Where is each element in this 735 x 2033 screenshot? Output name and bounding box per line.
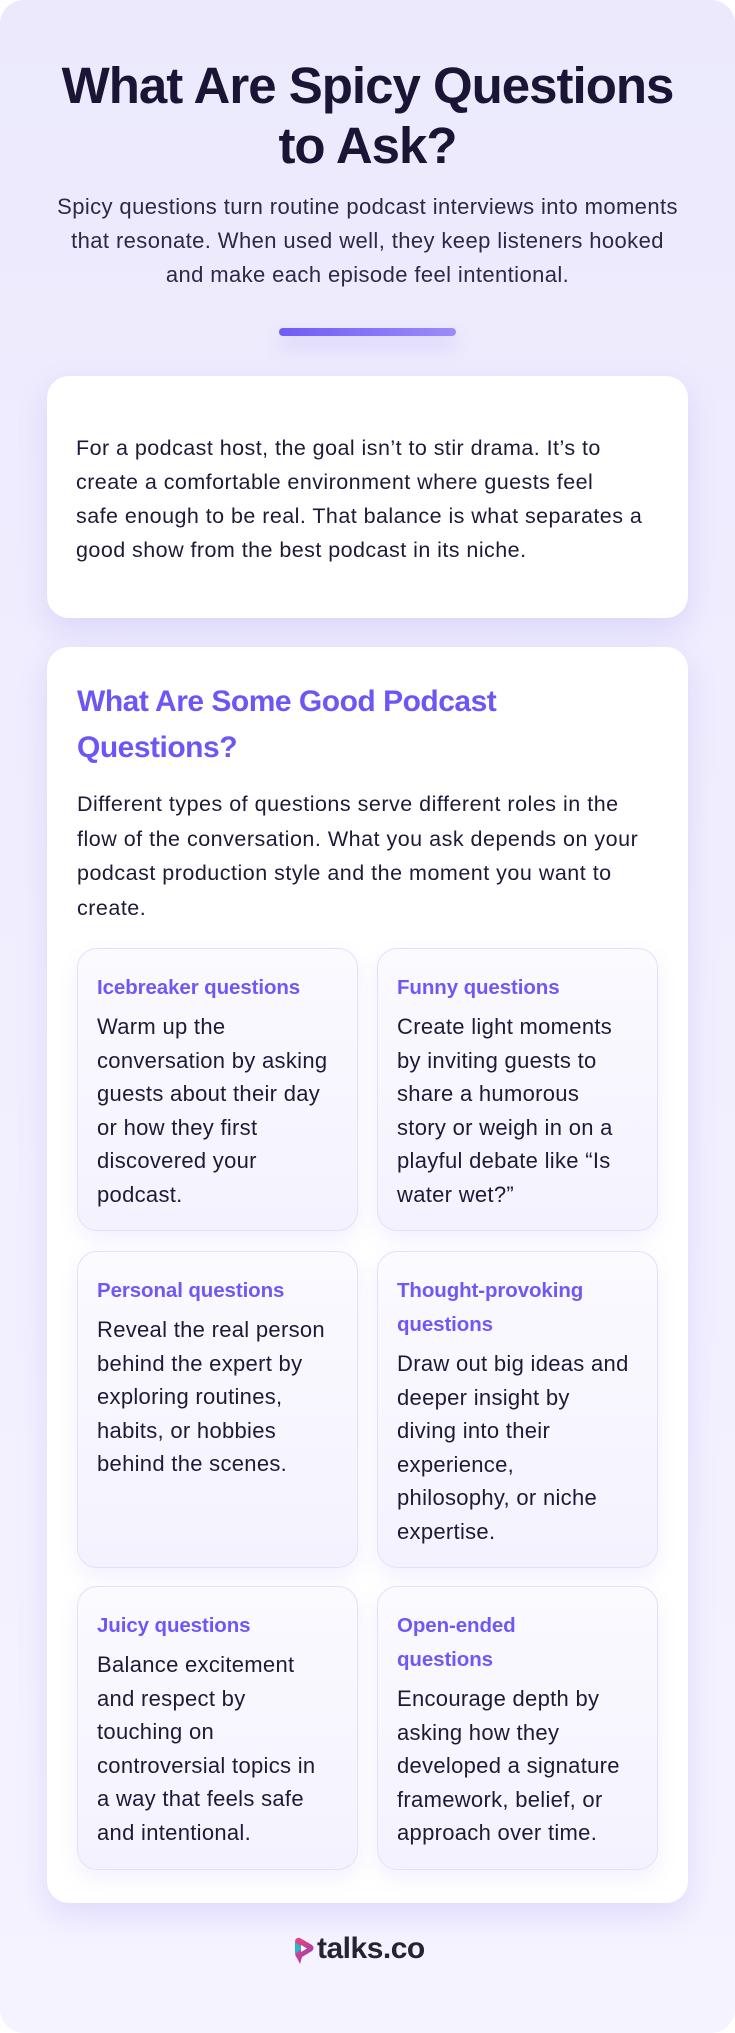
title bbox=[62, 57, 673, 174]
card: funny: by inviting guests to bbox=[397, 1048, 597, 1072]
section heading: What Are Some Good Podcast bbox=[77, 685, 496, 718]
card: funny: Create light moments bbox=[397, 1014, 612, 1039]
title: What Are Spicy Questions bbox=[62, 57, 673, 114]
icon: logo mark bbox=[295, 1938, 314, 1964]
card: thought-provoking: Thought-provoking bbox=[397, 1279, 583, 1302]
card: icebreaker: or how they first bbox=[97, 1114, 257, 1140]
card: thought-provoking: questions bbox=[397, 1313, 493, 1336]
panel: intro card bbox=[47, 376, 688, 618]
section intro text: flow of the conversation. What you ask depends on your bbox=[77, 826, 638, 850]
subtitle: that resonate. When used well, they keep listeners hooked bbox=[71, 228, 664, 253]
card: thought-provoking: philosophy, or niche bbox=[397, 1485, 597, 1510]
card: funny: story or weigh in on a bbox=[397, 1114, 613, 1140]
card: funny: Funny questions bbox=[397, 976, 560, 999]
card: open-ended: Open-ended bbox=[397, 1614, 516, 1637]
section intro text bbox=[77, 792, 638, 920]
card: funny bbox=[377, 948, 658, 1231]
card: icebreaker: podcast. bbox=[97, 1182, 183, 1206]
intro text: safe enough to be real. That balance is what separates a bbox=[76, 504, 642, 528]
section intro text: create. bbox=[77, 896, 146, 920]
card: juicy bbox=[77, 1586, 358, 1870]
intro text bbox=[76, 436, 642, 562]
intro text: create a comfortable environment where guests feel bbox=[76, 470, 593, 494]
card: icebreaker: Icebreaker questions bbox=[97, 976, 300, 999]
card: thought-provoking bbox=[377, 1251, 658, 1568]
card: funny: playful debate like “Is bbox=[397, 1148, 611, 1173]
card: open-ended bbox=[377, 1586, 658, 1870]
card: open-ended: approach over time. bbox=[397, 1820, 597, 1845]
card: thought-provoking: experience, bbox=[397, 1452, 514, 1476]
card: juicy: and respect by bbox=[97, 1686, 246, 1710]
subtitle bbox=[57, 194, 678, 287]
card: icebreaker: guests about their day bbox=[97, 1081, 320, 1106]
section heading bbox=[77, 685, 496, 764]
card: juicy: Balance excitement bbox=[97, 1652, 294, 1677]
section intro text: Different types of questions serve different roles in the bbox=[77, 792, 619, 816]
intro text: For a podcast host, the goal isn’t to stir drama. It’s to bbox=[76, 436, 601, 460]
card: juicy: a way that feels safe bbox=[97, 1786, 304, 1811]
card: thought-provoking: diving into their bbox=[397, 1418, 550, 1443]
card: icebreaker: Warm up the bbox=[97, 1014, 225, 1039]
logo text: talks.co bbox=[317, 1932, 425, 1965]
section heading: Questions? bbox=[77, 731, 237, 764]
subtitle: Spicy questions turn routine podcast interviews into moments bbox=[57, 194, 678, 219]
panel: good podcast questions bbox=[47, 647, 688, 1903]
card: juicy: Juicy questions bbox=[97, 1614, 250, 1637]
card: icebreaker bbox=[77, 948, 358, 1231]
card: funny: water wet?” bbox=[397, 1182, 514, 1206]
card: funny: share a humorous bbox=[397, 1081, 579, 1106]
card: open-ended: framework, belief, or bbox=[397, 1786, 603, 1812]
card: thought-provoking: expertise. bbox=[397, 1518, 495, 1544]
card: personal: exploring routines, bbox=[97, 1384, 282, 1409]
card: open-ended: Encourage depth by bbox=[397, 1686, 599, 1711]
card: thought-provoking: Draw out big ideas and bbox=[397, 1351, 629, 1376]
intro text: good show from the best podcast in its niche. bbox=[76, 538, 526, 562]
title: to Ask? bbox=[278, 117, 457, 174]
card: icebreaker: conversation by asking bbox=[97, 1048, 327, 1072]
card: juicy: touching on bbox=[97, 1719, 214, 1744]
card: open-ended: asking how they bbox=[397, 1720, 559, 1744]
accent divider bar bbox=[279, 328, 456, 336]
card: personal: Reveal the real person bbox=[97, 1317, 325, 1342]
card: personal: Personal questions bbox=[97, 1279, 284, 1302]
card: open-ended: developed a signature bbox=[397, 1753, 620, 1778]
card: icebreaker: discovered your bbox=[97, 1148, 257, 1173]
subtitle: and make each episode feel intentional. bbox=[166, 262, 569, 287]
section intro text: podcast production style and the moment you want to bbox=[77, 861, 612, 885]
card: personal: habits, or hobbies bbox=[97, 1418, 276, 1442]
card: personal bbox=[77, 1251, 358, 1568]
card: juicy: controversial topics in bbox=[97, 1752, 315, 1778]
logo: talks.co bbox=[295, 1932, 425, 1965]
card: personal: behind the expert by bbox=[97, 1350, 302, 1376]
card: personal: behind the scenes. bbox=[97, 1451, 287, 1476]
card: open-ended: questions bbox=[397, 1648, 493, 1671]
card: thought-provoking: deeper insight by bbox=[397, 1384, 570, 1410]
card: juicy: and intentional. bbox=[97, 1820, 251, 1844]
